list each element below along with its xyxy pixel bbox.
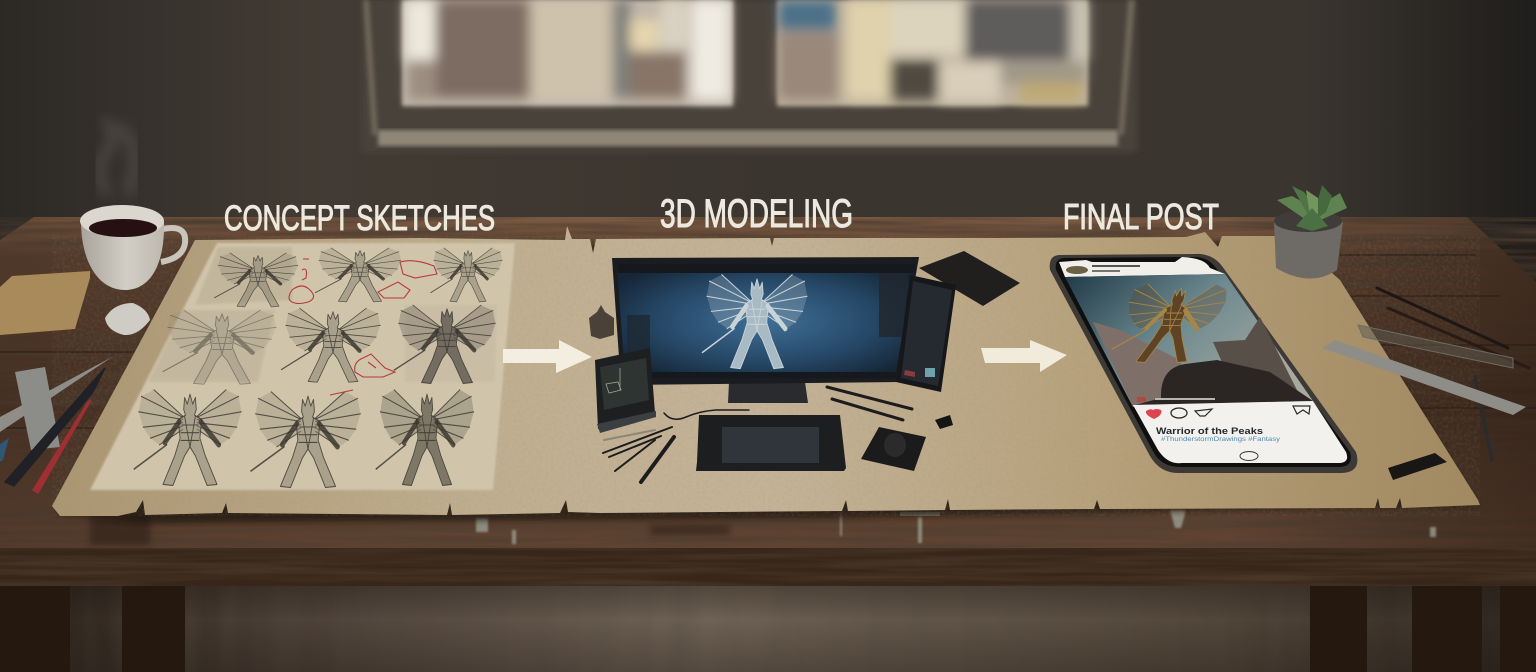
usb drive [1388, 453, 1447, 480]
small stand display [595, 348, 656, 433]
pen tablet [696, 415, 846, 471]
screen top bar [1059, 257, 1225, 277]
sketch figures grid [134, 248, 502, 488]
hashtags: #ThunderstormDrawings #Fantasy [1161, 436, 1281, 443]
window [362, 0, 1137, 152]
title: final post: FINAL POST [1063, 196, 1219, 237]
steam [99, 119, 134, 195]
weight block [589, 305, 614, 339]
table top [0, 217, 1536, 586]
phone [1050, 254, 1357, 473]
coffee mug [80, 119, 185, 290]
monitor [612, 257, 919, 403]
table legs [0, 586, 1536, 672]
title: 3D modeling: 3D MODELING [660, 192, 853, 236]
eraser [105, 303, 150, 335]
panel: concept sketches sheet [90, 243, 515, 490]
tools left [0, 357, 112, 493]
notebook [0, 271, 90, 335]
wall background [0, 0, 1536, 240]
caption: Warrior of the Peaks [1156, 426, 1263, 437]
usb dongle [935, 415, 953, 429]
styluses and cable [603, 387, 912, 482]
actions row [1146, 406, 1310, 419]
winged warrior [1108, 284, 1231, 362]
arrow: modeling to final post [981, 340, 1067, 372]
screen lower white [1133, 401, 1347, 463]
arrow: sketches to modeling [503, 340, 592, 373]
mouse and pad [861, 427, 926, 471]
tools right [1358, 288, 1529, 460]
side tablet [896, 275, 956, 392]
notebook black [919, 251, 1020, 306]
red pencil notes [289, 259, 437, 395]
3D model figure [702, 275, 807, 369]
plant [1274, 185, 1347, 279]
title: concept sketches: CONCEPT SKETCHES [224, 199, 495, 238]
home button [1240, 452, 1258, 460]
floor [0, 585, 1536, 672]
panel: kraft paper [52, 226, 1480, 523]
post image [1065, 274, 1313, 407]
steel ruler [1322, 340, 1526, 415]
